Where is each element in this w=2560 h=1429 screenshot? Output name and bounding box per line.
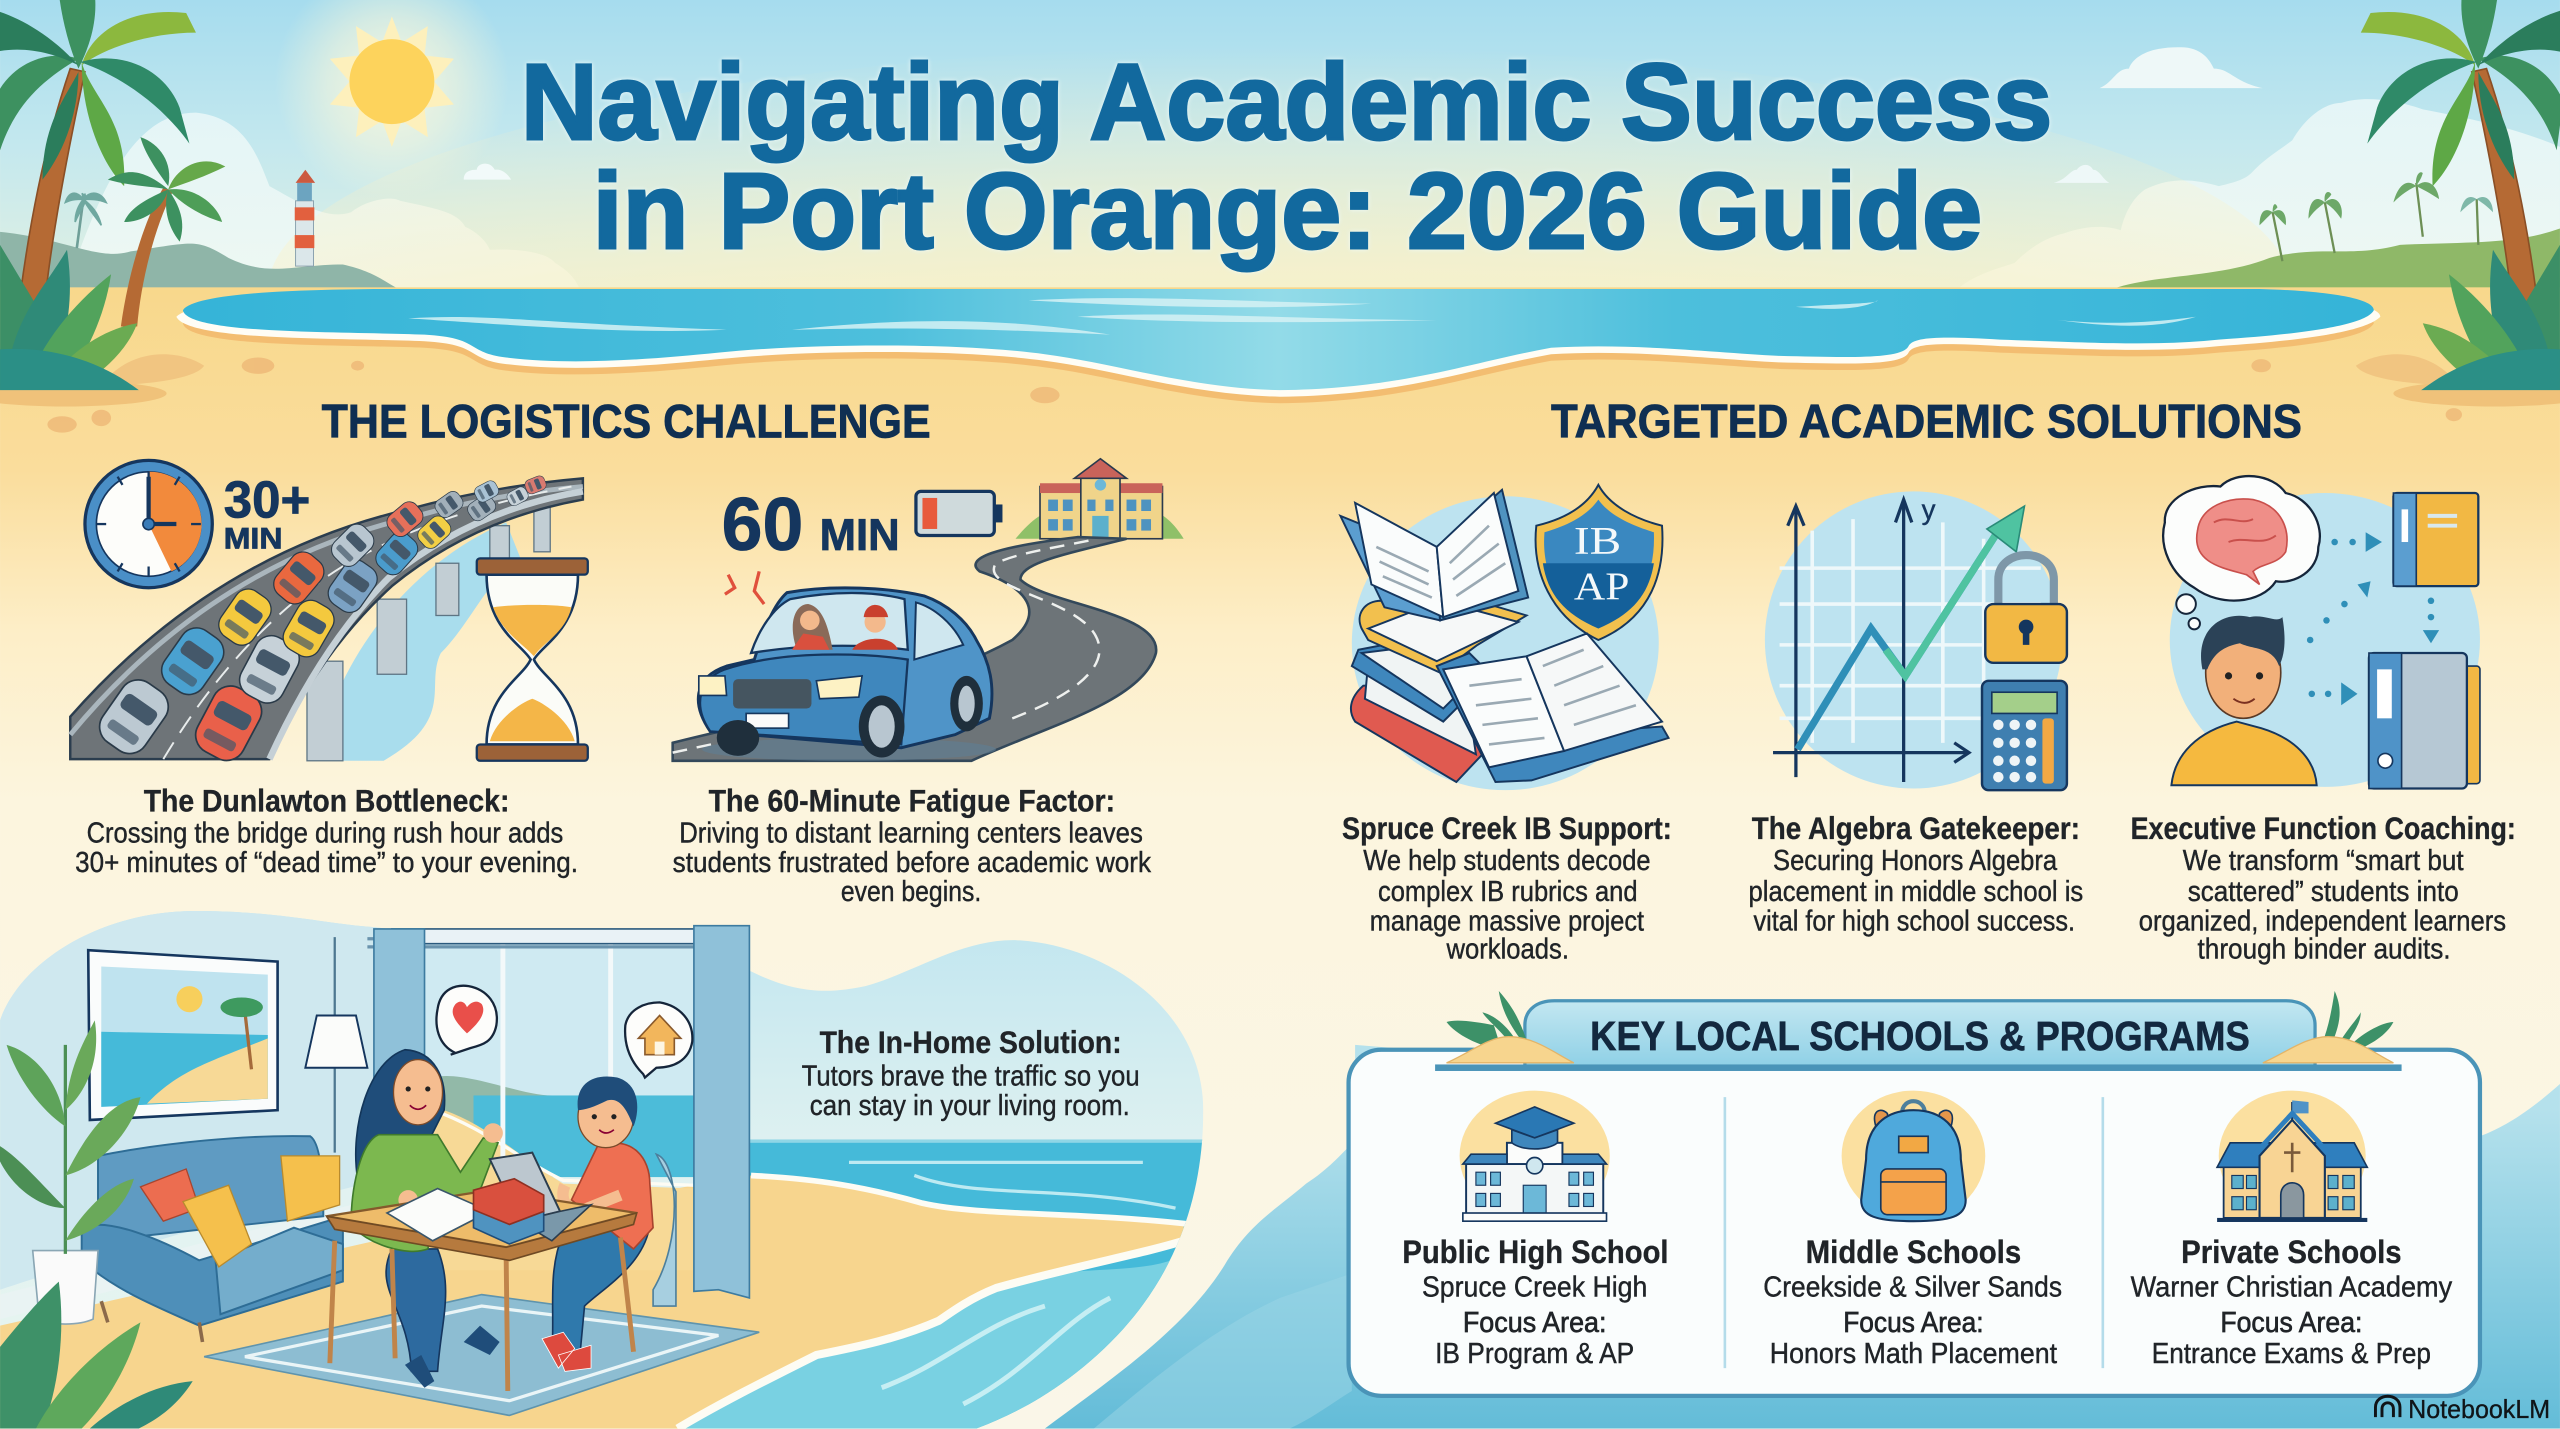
icon: low battery xyxy=(916,491,1002,535)
icon: school building xyxy=(1016,459,1184,539)
open book front xyxy=(1437,633,1669,782)
water under bridge xyxy=(318,522,522,761)
text: executive function coaching: through binder audits. xyxy=(2198,933,2451,965)
school details xyxy=(1763,1233,2062,1370)
stat: 60 min: 60 xyxy=(722,482,803,566)
sofa pillows xyxy=(140,1156,340,1267)
background wave inner layer xyxy=(1094,1273,1352,1429)
school details: Spruce Creek High xyxy=(1422,1271,1647,1303)
cars xyxy=(92,474,548,767)
laptop xyxy=(490,1153,591,1241)
ocean with shoreline xyxy=(176,289,2380,403)
text: dunlawton bottleneck xyxy=(75,783,578,879)
panel: in-home solution scene xyxy=(0,906,1216,1429)
pebbles xyxy=(47,358,2462,433)
foreground plant xyxy=(0,1282,193,1429)
window view xyxy=(367,929,743,1270)
banner palm decoration right xyxy=(2263,991,2393,1063)
clouds left xyxy=(65,113,580,291)
text: executive function coaching: scattered” students into xyxy=(2188,876,2459,908)
text: in-home solution: can stay in your living room. xyxy=(810,1090,1130,1122)
heading: the logistics challenge: THE LOGISTICS CHALLENGE xyxy=(322,396,931,449)
text: algebra gatekeeper xyxy=(1749,811,2083,938)
text: in-home solution xyxy=(802,1025,1140,1122)
icon: private school chapel xyxy=(2217,1091,2367,1222)
illustration: bridge traffic xyxy=(70,474,583,767)
school details xyxy=(1402,1233,1669,1370)
clouds right xyxy=(1958,99,2560,289)
boy student xyxy=(542,1076,676,1371)
text: spruce creek IB support: We help students decode xyxy=(1363,845,1651,877)
text: algebra gatekeeper: Securing Honors Algebra xyxy=(1773,845,2057,877)
boy portrait xyxy=(2171,616,2317,785)
title: in Port Orange: 2026 Guide xyxy=(593,150,1982,271)
banner xyxy=(1435,1001,2402,1071)
woman tutor xyxy=(351,1050,503,1388)
icon: algebra chart with lock and calculator xyxy=(1765,491,2067,790)
text: dunlawton bottleneck: 30+ minutes of “dead time” to your evening. xyxy=(75,847,578,879)
text: 60-minute fatigue factor xyxy=(673,783,1152,908)
sofa xyxy=(82,1136,343,1342)
sun xyxy=(274,0,509,199)
icon: backpack xyxy=(1842,1091,1985,1221)
stat: 30+ min xyxy=(224,472,310,556)
small cloud right xyxy=(2054,165,2109,183)
stat: 30+ min: MIN xyxy=(224,523,282,556)
right beach plant xyxy=(2356,245,2560,407)
icon: hourglass xyxy=(477,558,588,761)
icon: clock xyxy=(85,460,212,588)
right palm tree xyxy=(2361,0,2560,327)
title: Navigating Academic Success xyxy=(521,41,2052,162)
column: private schools xyxy=(2131,1091,2453,1370)
text: in-home solution: The In-Home Solution: xyxy=(820,1025,1122,1060)
sky background xyxy=(0,0,2560,294)
NotebookLM watermark: NotebookLM xyxy=(2408,1394,2550,1424)
framed beach picture xyxy=(88,950,278,1120)
rug xyxy=(204,1295,759,1415)
text: algebra gatekeeper: The Algebra Gatekeeper: xyxy=(1752,811,2080,846)
school details: Middle Schools xyxy=(1806,1233,2021,1270)
right curtain xyxy=(694,926,749,1298)
book stack xyxy=(1351,591,1527,782)
banner heading: KEY LOCAL SCHOOLS & PROGRAMS xyxy=(1590,1013,2250,1059)
text: 60-minute fatigue factor: even begins. xyxy=(841,876,981,908)
column: public high school xyxy=(1402,1091,1669,1370)
distant palms right xyxy=(2260,172,2493,261)
icon: algebra chart with lock and calculator: y xyxy=(1922,494,1936,525)
speech bubble: heart xyxy=(436,986,497,1055)
text: algebra gatekeeper: vital for high school success. xyxy=(1753,906,2075,938)
text: 60-minute fatigue factor: students frustrated before academic work xyxy=(673,847,1152,879)
panel card xyxy=(1349,1050,2480,1396)
icon: books and IB AP shield xyxy=(1340,485,1669,790)
column: middle schools xyxy=(1763,1091,2062,1370)
school details: Focus Area: xyxy=(1843,1307,1984,1339)
text: spruce creek IB support: Spruce Creek IB Support: xyxy=(1342,811,1672,846)
stat: 60 min xyxy=(722,482,900,566)
left palm tree xyxy=(0,0,196,327)
passengers xyxy=(792,604,898,650)
school details: Warner Christian Academy xyxy=(2131,1271,2453,1303)
text: spruce creek IB support: complex IB rubrics and xyxy=(1378,876,1638,908)
text: 60-minute fatigue factor: Driving to distant learning centers leaves xyxy=(679,817,1143,849)
small cloud left xyxy=(464,164,511,180)
sand xyxy=(0,287,2560,1429)
text: executive function coaching: We transform “smart but xyxy=(2183,845,2464,877)
hills right xyxy=(2113,229,2560,289)
school details: Creekside & Silver Sands xyxy=(1763,1271,2062,1303)
blue binder xyxy=(2369,653,2480,789)
school details: IB Program & AP xyxy=(1435,1338,1634,1370)
dotted arrows xyxy=(2307,532,2439,705)
speech bubble: house xyxy=(625,1002,692,1078)
small cloud top right xyxy=(2100,47,2263,88)
text: spruce creek IB support xyxy=(1342,811,1672,965)
shield: AP xyxy=(1574,565,1629,608)
table xyxy=(327,1190,637,1391)
text: dunlawton bottleneck: Crossing the bridge during rush hour adds xyxy=(87,817,563,849)
text: spruce creek IB support: manage massive project xyxy=(1370,906,1644,938)
illustration: winding road xyxy=(673,537,1156,761)
text: executive function coaching xyxy=(2131,811,2516,965)
text: in-home solution: Tutors brave the traffic so you xyxy=(802,1061,1140,1093)
text: 60-minute fatigue factor: The 60-Minute Fatigue Factor: xyxy=(709,783,1115,818)
school details: Public High School xyxy=(1402,1233,1669,1270)
heading: targeted academic solutions: TARGETED ACADEMIC SOLUTIONS xyxy=(1551,396,2302,449)
stat: 60 min: MIN xyxy=(820,511,900,560)
hills left xyxy=(0,232,398,289)
shield xyxy=(1536,485,1662,640)
school details: Honors Math Placement xyxy=(1770,1338,2057,1370)
school details: Focus Area: xyxy=(1463,1307,1607,1339)
potted plant xyxy=(0,1020,140,1324)
distant palm left xyxy=(65,193,106,248)
left curtain xyxy=(374,929,425,1167)
text: executive function coaching: organized, independent learners xyxy=(2139,906,2506,938)
panel: key local schools and programs xyxy=(1349,991,2480,1396)
school details: Focus Area: xyxy=(2220,1307,2362,1339)
background wave lower centre xyxy=(1045,1126,1371,1429)
text: dunlawton bottleneck: The Dunlawton Bottleneck: xyxy=(144,783,509,818)
icon: high school with graduation cap xyxy=(1460,1091,1610,1221)
bridge piers xyxy=(307,506,550,761)
calculator xyxy=(1982,681,2067,790)
thought cloud and brain xyxy=(2163,476,2320,629)
banner palm decoration left xyxy=(1447,991,1574,1063)
icon: executive function boy, brain and binders xyxy=(2163,476,2480,789)
stat: 30+ min: 30+ xyxy=(224,472,310,530)
background wave lower right xyxy=(1355,1045,2560,1429)
padlock xyxy=(1985,555,2067,663)
yellow folder xyxy=(2393,493,2478,586)
left beach plant xyxy=(0,245,204,407)
school details: Private Schools xyxy=(2181,1233,2402,1270)
shield: IB xyxy=(1574,519,1621,562)
illustration: blue car with frustrated family xyxy=(698,571,996,761)
open book xyxy=(1340,490,1528,620)
notebook xyxy=(387,1189,490,1241)
scene background blob xyxy=(0,906,1216,1429)
title xyxy=(521,41,2052,271)
lighthouse xyxy=(295,170,315,266)
stacked books xyxy=(474,1179,544,1244)
horizon glow xyxy=(268,46,2292,535)
text: algebra gatekeeper: placement in middle school is xyxy=(1749,876,2083,908)
second left palm xyxy=(108,137,225,327)
text: spruce creek IB support: workloads. xyxy=(1446,933,1569,965)
floor lamp xyxy=(305,937,367,1153)
school details: Entrance Exams & Prep xyxy=(2152,1338,2431,1370)
school details xyxy=(2131,1233,2453,1370)
bridge road xyxy=(70,478,583,759)
